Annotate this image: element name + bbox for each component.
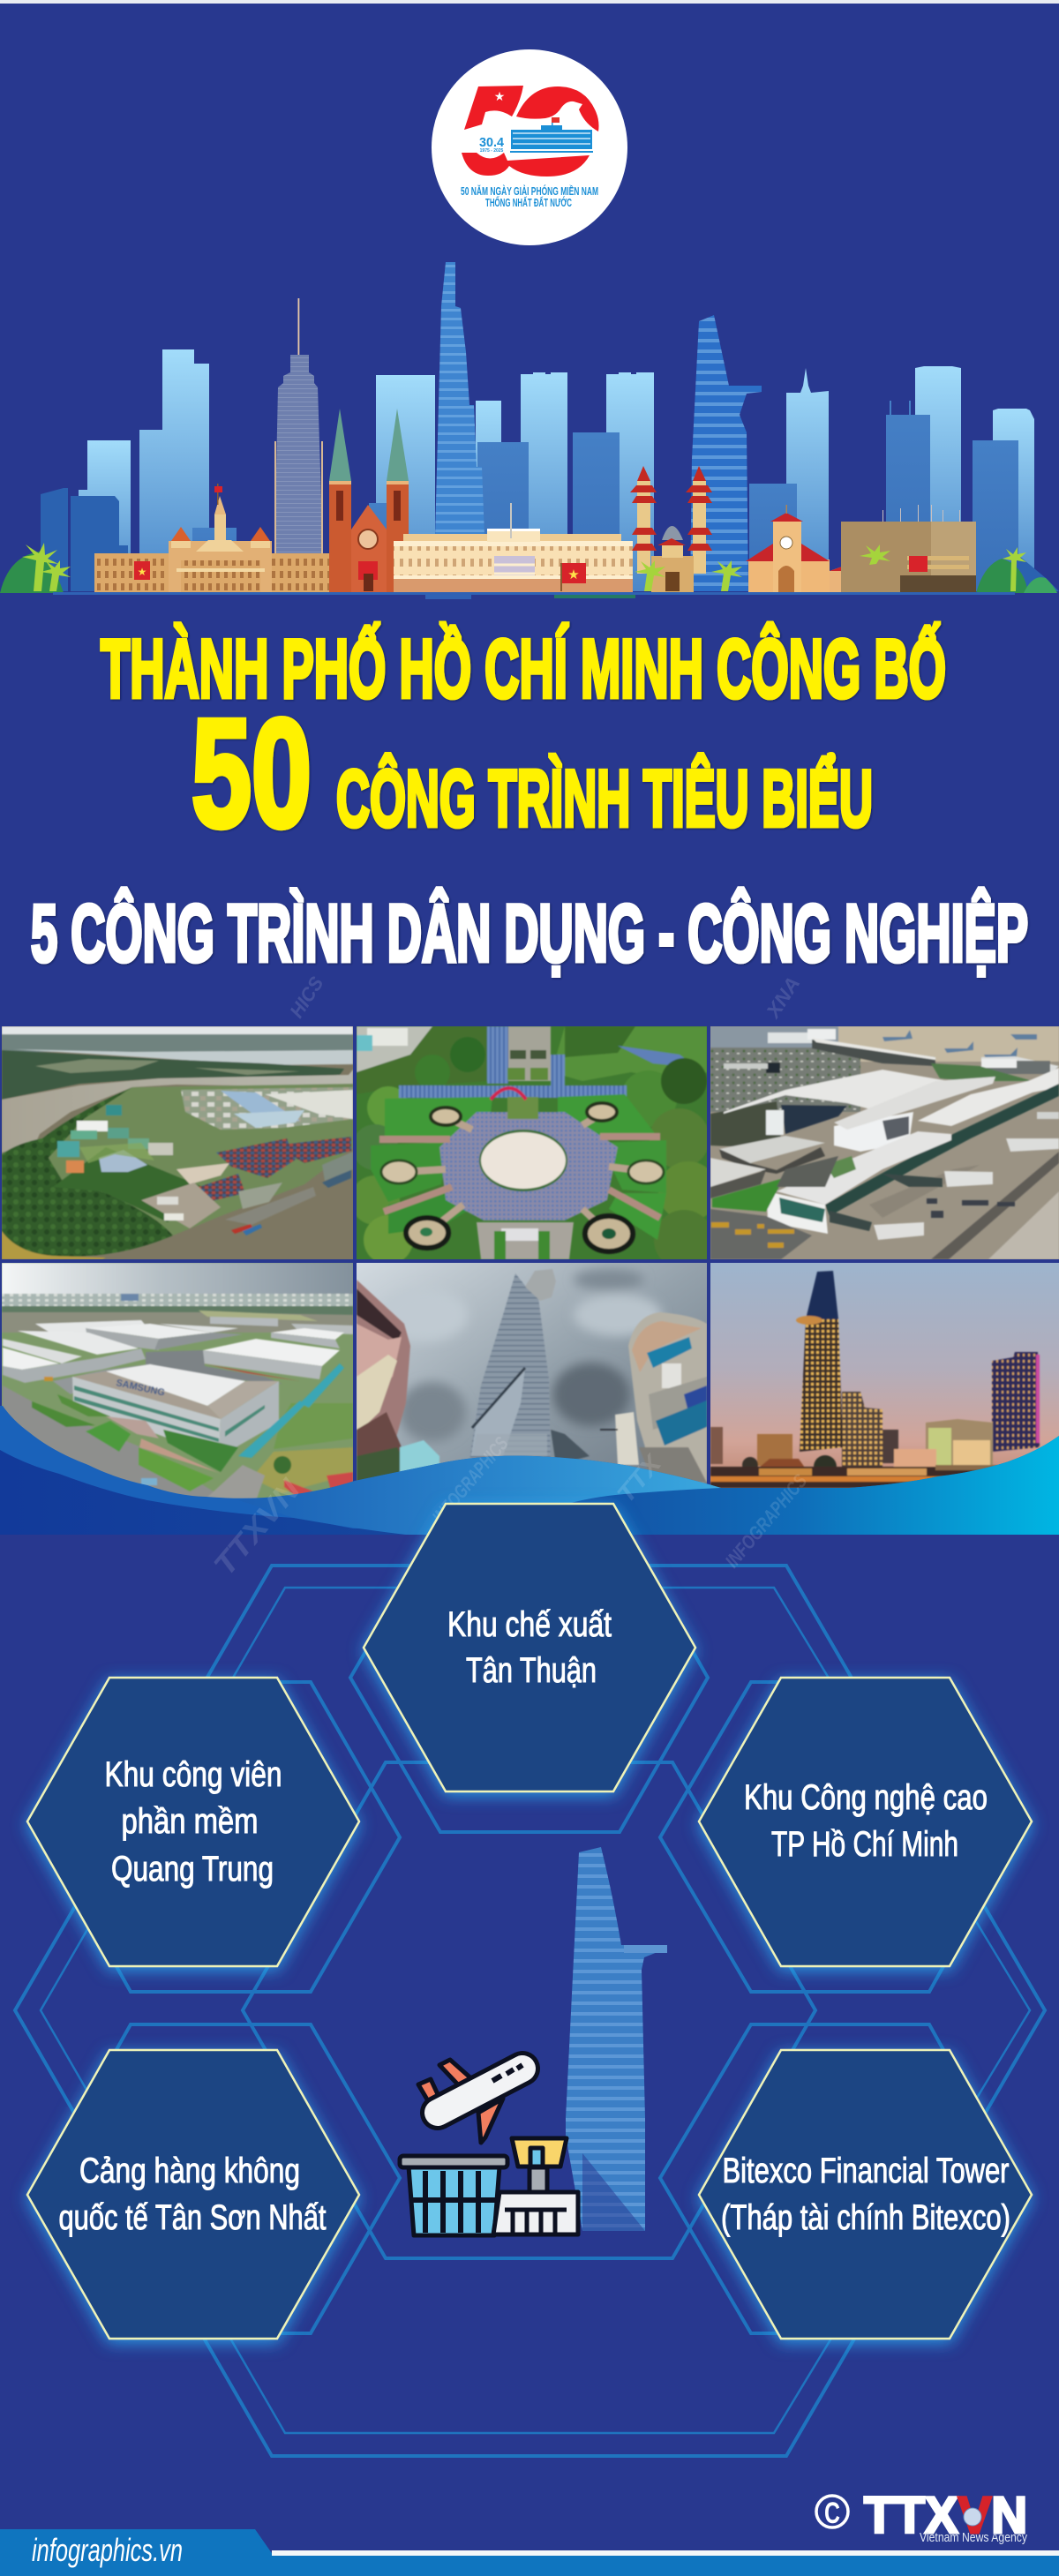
watermarks: TTXVN	[207, 1472, 308, 1582]
agency tagline: Vietnam News Agency	[920, 2530, 1027, 2545]
photo: Bitexco at dusk	[710, 1263, 1059, 1501]
agency letters: TTXVN	[864, 2487, 1027, 2544]
dark blue towers	[41, 488, 1059, 591]
logo caption line two: THỐNG NHẤT ĐẤT NƯỚC	[485, 196, 572, 209]
hexagon label lines: Cảng hàng không	[79, 2152, 300, 2190]
photo: Saigon Hi-Tech Park: SAMSUNG	[115, 1378, 166, 1399]
watermarks: XNA	[761, 973, 804, 1024]
hexagon label lines: Khu chế xuất	[447, 1605, 612, 1644]
city hall: ★	[138, 566, 146, 578]
logo caption line one: 50 NĂM NGÀY GIẢI PHÓNG MIỀN NAM	[461, 184, 598, 198]
hexagon label lines	[104, 1755, 282, 1889]
watermarks: INFOGRAPHICS	[428, 1432, 513, 1528]
logo lower swoosh	[462, 153, 590, 176]
hexagon label lines: TP Hồ Chí Minh	[771, 1825, 958, 1864]
hexagon label lines	[447, 1605, 612, 1690]
watermarks	[207, 973, 812, 1582]
photo: Saigon Hi-Tech Park	[2, 1263, 353, 1501]
photo: Tan Son Nhat airport	[710, 1026, 1059, 1259]
photo: Tan Thuan export zone	[2, 1026, 353, 1259]
watermarks: HICS	[285, 973, 328, 1022]
Ben Thanh market	[746, 505, 899, 592]
hexagon label lines: quốc tế Tân Sơn Nhất	[58, 2198, 327, 2237]
Bitexco tower	[690, 315, 762, 591]
logo numeral five	[464, 86, 523, 130]
watermarks: TTX	[612, 1448, 668, 1508]
top edge line	[0, 0, 1059, 4]
icon: airplane	[418, 2060, 522, 2143]
hexagon label lines	[58, 2152, 327, 2237]
hexagon label lines	[744, 1778, 988, 1864]
hexagon: Bitexco Financial Tower	[699, 2050, 1032, 2339]
logo date: 30.4	[479, 136, 504, 150]
hexagon: Cảng hàng không quốc tế Tân Sơn Nhất	[27, 2050, 359, 2339]
lighter wave	[238, 1456, 721, 1535]
hexagon label lines: Quang Trung	[111, 1850, 274, 1889]
Cao Dai pagoda towers	[630, 466, 712, 592]
title number 50: 50	[192, 687, 312, 859]
hexagon: Khu công viên phần mềm Quang Trung	[27, 1678, 359, 1966]
logo palace	[510, 117, 593, 153]
TTXVN logo	[816, 2487, 1027, 2545]
hexagon label lines	[721, 2152, 1010, 2237]
skyline illustration	[0, 262, 1059, 599]
logo star: ★	[494, 89, 505, 103]
Independence Palace	[394, 503, 633, 592]
copyright mark	[816, 2496, 848, 2527]
hexagon label lines: Khu Công nghệ cao	[744, 1778, 988, 1817]
logo: 50 years badge	[432, 49, 627, 245]
hexagon label lines: phần mềm	[122, 1802, 258, 1841]
footer website: infographics.vn	[32, 2532, 183, 2568]
logo numeral zero with dove	[516, 86, 598, 131]
ground strip	[53, 592, 1015, 599]
photo: Bitexco from street level	[357, 1263, 707, 1501]
watermarks: INFOGRAPHICS	[721, 1469, 812, 1572]
green hills	[0, 552, 1057, 593]
background hexagon lines	[15, 1523, 1045, 2456]
hexagon: Khu chế xuất Tân Thuận	[364, 1504, 695, 1791]
Notre Dame cathedral	[329, 409, 409, 592]
wave banner	[0, 1406, 1059, 1535]
hexagon: Khu Công nghệ cao TP Hồ Chí Minh	[699, 1678, 1032, 1966]
Landmark tall tower	[435, 262, 484, 536]
agency globe	[964, 2508, 981, 2526]
photo: Quang Trung software park	[350, 1026, 718, 1270]
Landmark 81 tower	[274, 298, 323, 591]
palm trees	[22, 543, 1026, 591]
Independence Palace: ★	[567, 567, 580, 582]
dark lower band	[0, 1436, 1059, 1535]
light blue towers	[79, 349, 1034, 592]
TTXVN logo: C	[824, 2497, 840, 2530]
logo years: 1975 - 2025	[480, 148, 504, 154]
title	[31, 622, 1028, 979]
city hall	[94, 484, 348, 592]
icon: airport terminal	[400, 2138, 578, 2235]
center Bitexco tower illustration	[566, 1847, 667, 2231]
footer band	[0, 2529, 1059, 2576]
opera hall box	[841, 505, 976, 592]
hexagon label lines: Khu công viên	[104, 1755, 282, 1794]
hexagon label lines: Tân Thuận	[466, 1651, 597, 1690]
mid blue towers	[192, 401, 1018, 591]
